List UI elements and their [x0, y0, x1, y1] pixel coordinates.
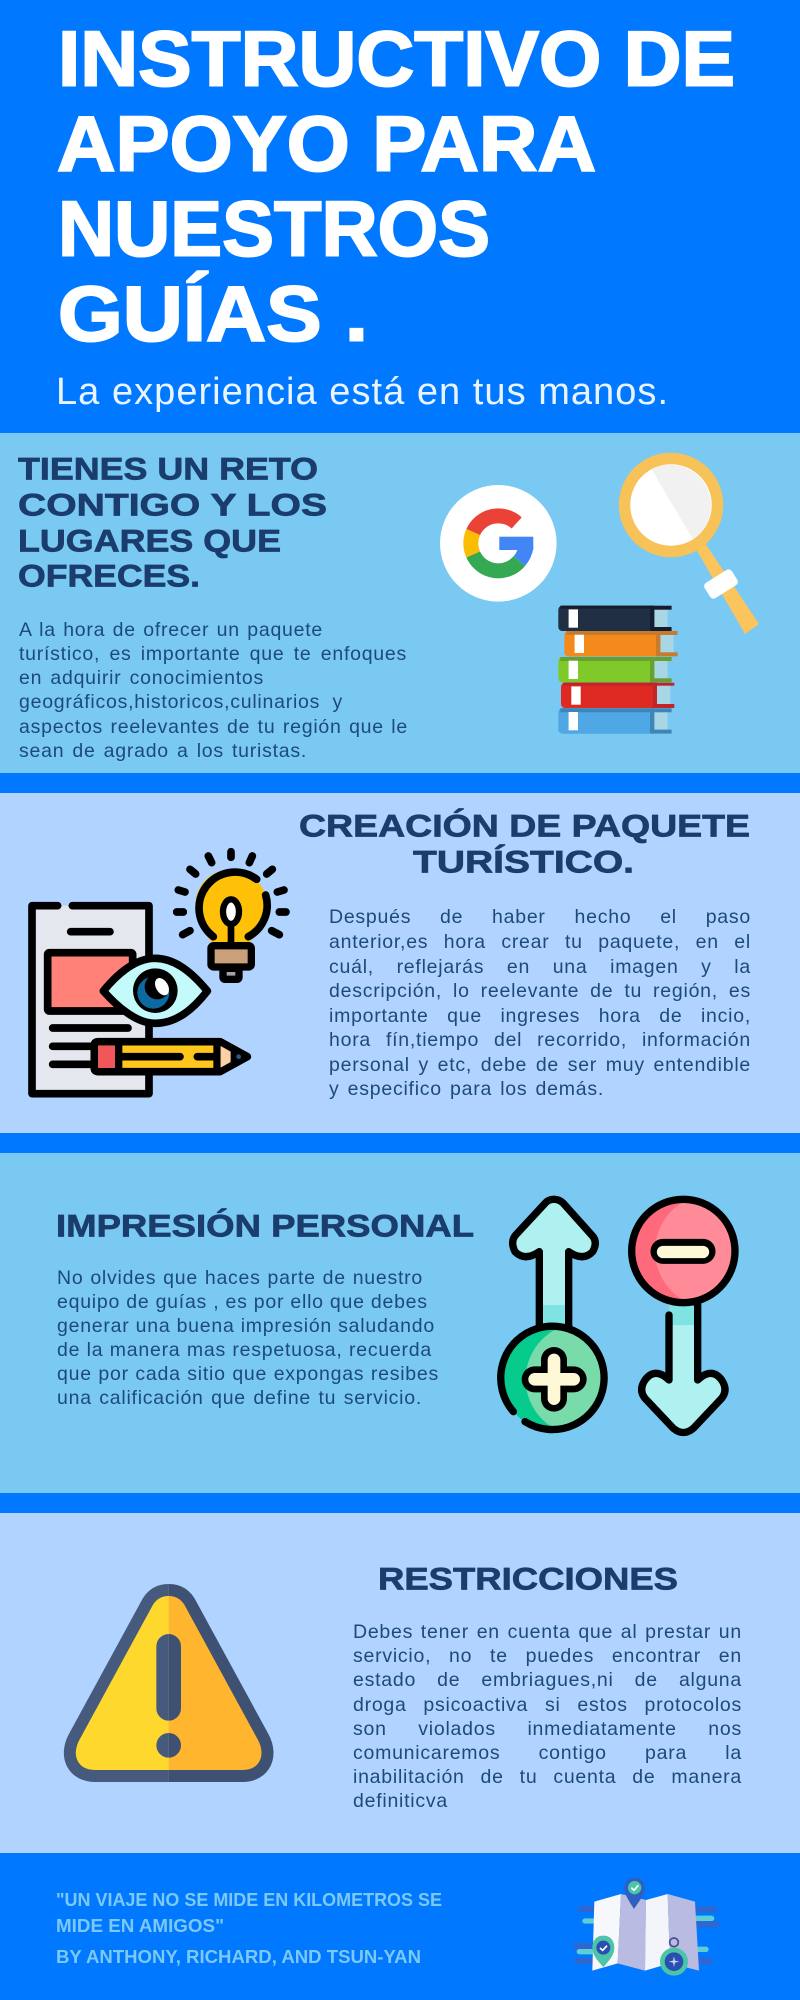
text block: despues de haber hecho	[329, 905, 769, 1115]
text block: debes tener en cuenta	[353, 1620, 773, 1830]
icon: document, eye, bulb and pencil	[32, 852, 286, 1094]
text block: debes tener en cuenta: inabilitación de tu cuenta de manera	[353, 1766, 742, 1788]
icon: top pin	[624, 1878, 645, 1909]
icon: warning triangle	[70, 1590, 268, 1776]
text block: no olvides: que por cada sitio que expongas resibes	[57, 1363, 439, 1385]
text block: despues de haber hecho: cuál, reflejarás en una imagen y la	[329, 956, 751, 978]
text block: despues de haber hecho: descripción, lo reelevante de tu región, es	[329, 980, 751, 1002]
icon: compass	[660, 1938, 688, 1976]
title: APOYO PARA	[57, 100, 596, 188]
icon: left pin	[592, 1936, 614, 1967]
icon: down arrow	[642, 1303, 725, 1432]
book: navy	[558, 606, 672, 631]
icon: google logo	[440, 485, 557, 602]
text block: no olvides: de la manera mas respetuosa, recuerda	[57, 1339, 432, 1361]
icon: up and down arrows with plus and minus	[501, 1199, 735, 1432]
text block: paquete turistico: turístico, es importante que te enfoques	[19, 643, 407, 665]
text block: debes tener en cuenta: droga psicoactiva si estos protocolos	[353, 1694, 742, 1716]
text block: debes tener en cuenta: son violados inmediatamente nos	[353, 1718, 742, 1740]
panel: footer	[0, 1853, 800, 2000]
panel: restricciones	[0, 1513, 800, 1853]
text block: paquete turistico: sean de agrado a los turistas.	[19, 740, 307, 762]
quote	[56, 1890, 442, 1936]
panel: impresion personal	[0, 1153, 800, 1493]
title: NUESTROS	[58, 184, 490, 272]
heading: tienes un reto: LUGARES QUE	[18, 522, 281, 558]
subtitle: La experiencia está en tus manos.	[56, 371, 668, 413]
text block: despues de haber hecho: anterior,es hora crear tu paquete, en el	[329, 931, 751, 953]
text block: despues de haber hecho: personal y etc, debe de ser muy entendible	[329, 1054, 751, 1076]
icon: magnifying glass	[624, 458, 759, 634]
quote: "UN VIAJE NO SE MIDE EN KILOMETROS SE	[56, 1890, 442, 1910]
panel: creacion de paquete	[0, 793, 800, 1133]
text block: no olvides: generar una buena impresión saludando	[57, 1315, 435, 1337]
icon: folded map with pins and compass	[576, 1878, 717, 1976]
text block: debes tener en cuenta: estado de embriagues,ni de alguna	[353, 1669, 742, 1691]
icon: pencil	[94, 1042, 248, 1072]
text block: no olvides	[57, 1267, 477, 1417]
icon: plus circle	[501, 1326, 606, 1431]
text block: debes tener en cuenta: definiticva	[353, 1790, 448, 1812]
quote: MIDE EN AMIGOS"	[56, 1916, 224, 1936]
text block: no olvides: una calificación que define tu servicio.	[57, 1387, 422, 1409]
credits: BY ANTHONY, RICHARD, AND TSUN-YAN	[56, 1947, 421, 1967]
icon: up arrow	[513, 1199, 595, 1330]
icon: document	[32, 906, 149, 1094]
icon: light bulb	[177, 852, 286, 979]
text block: paquete turistico: en adquirir conocimientos	[19, 667, 264, 689]
text block: paquete turistico: A la hora de ofrecer un paquete	[19, 619, 323, 641]
icon: eye	[103, 958, 207, 1023]
heading: restricciones: RESTRICCIONES	[378, 1560, 678, 1596]
book: orange	[564, 631, 678, 656]
heading: tienes un reto	[18, 450, 327, 594]
text block: despues de haber hecho: hora fín,tiempo del recorrido, información	[329, 1029, 751, 1051]
icon: minus circle	[632, 1199, 735, 1303]
book: blue	[558, 708, 672, 734]
panel: tienes un reto	[0, 433, 800, 773]
book: green	[558, 657, 672, 682]
text block: paquete turistico: geográficos,historicos,culinarios y	[19, 691, 343, 713]
text block: despues de haber hecho: importante que ingreses hora de incio,	[329, 1005, 751, 1027]
text block: debes tener en cuenta: servicio, no te puedes encontrar en	[353, 1645, 742, 1667]
heading: creacion de paquete turistico: CREACIÓN DE PAQUETE	[299, 808, 750, 844]
text block: no olvides: equipo de guías , es por ello que debes	[57, 1291, 428, 1313]
book: red	[561, 683, 674, 708]
title	[57, 14, 735, 358]
text block: paquete turistico	[19, 618, 439, 768]
heading: impresion personal: IMPRESIÓN PERSONAL	[56, 1208, 474, 1244]
icon: stack of books	[558, 606, 678, 734]
heading: tienes un reto: OFRECES.	[18, 558, 200, 594]
text block: no olvides: No olvides que haces parte de nuestro	[57, 1267, 423, 1289]
panel: header	[0, 0, 800, 433]
text block: despues de haber hecho: y especifico para los demás.	[329, 1078, 604, 1100]
title: INSTRUCTIVO DE	[58, 14, 735, 102]
text block: paquete turistico: aspectos reelevantes de tu región que le	[19, 716, 408, 738]
text block: debes tener en cuenta: Debes tener en cuenta que al prestar un	[353, 1621, 742, 1643]
text block: debes tener en cuenta: comunicaremos contigo para la	[353, 1742, 742, 1764]
heading: creacion de paquete turistico	[299, 808, 750, 880]
text block: despues de haber hecho: Después de haber hecho el paso	[329, 906, 751, 928]
heading: tienes un reto: TIENES UN RETO	[18, 450, 318, 486]
title: GUÍAS .	[58, 270, 368, 358]
heading: creacion de paquete turistico: TURÍSTICO.	[413, 844, 634, 880]
heading: tienes un reto: CONTIGO Y LOS	[18, 486, 327, 522]
